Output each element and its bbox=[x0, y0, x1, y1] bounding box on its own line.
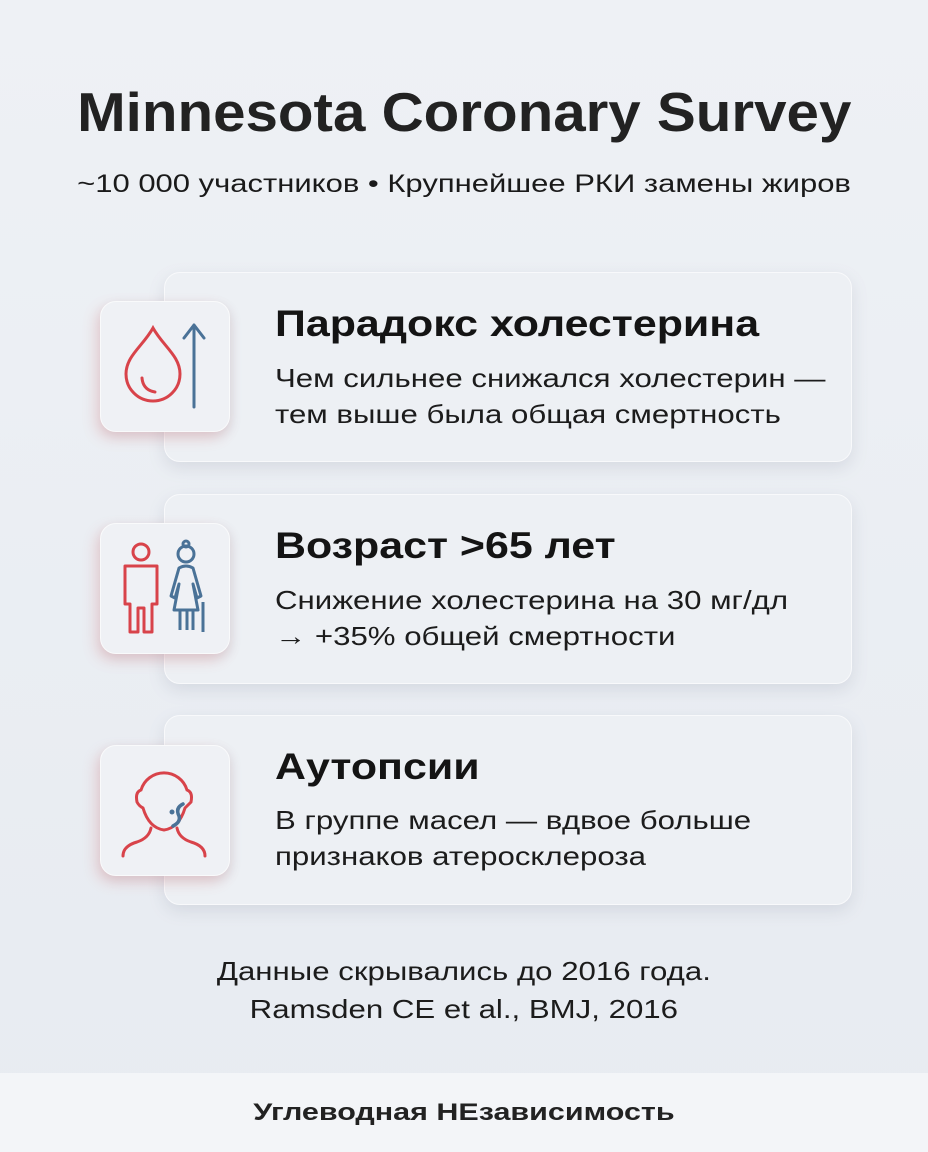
footer note: Ramsden CE et al., BMJ, 2016 bbox=[250, 994, 678, 1024]
text: paradox: Чем сильнее снижался холестерин — bbox=[275, 363, 825, 393]
text: autopsy: В группе масел — вдвое больше bbox=[275, 805, 751, 835]
title: Minnesota Coronary Survey bbox=[77, 81, 851, 143]
icon: head silhouette bbox=[100, 745, 230, 876]
heading: autopsy: Аутопсии bbox=[275, 746, 480, 787]
text: age: Снижение холестерина на 30 мг/дл bbox=[275, 585, 788, 615]
text: autopsy: признаков атеросклероза bbox=[275, 841, 646, 871]
bottom band bbox=[0, 1073, 928, 1152]
text: paradox bbox=[275, 363, 826, 429]
text: age bbox=[275, 585, 788, 651]
panel: cholesterol paradox bbox=[164, 272, 852, 462]
footer note: Данные скрывались до 2016 года. bbox=[217, 956, 711, 986]
bottom band: Углеводная НЕзависимость bbox=[253, 1099, 675, 1126]
panel: age bbox=[164, 494, 852, 684]
footer note bbox=[217, 956, 711, 1024]
text: autopsy bbox=[275, 805, 751, 871]
text: paradox: тем выше была общая смертность bbox=[275, 399, 781, 429]
panel: autopsy bbox=[164, 715, 852, 905]
subtitle: ~10 000 участников • Крупнейшее РКИ замены жиров bbox=[77, 170, 851, 198]
heading: paradox: Парадокс холестерина bbox=[275, 303, 759, 344]
text: age: → +35% общей смертности bbox=[275, 621, 675, 651]
heading: age: Возраст >65 лет bbox=[275, 525, 616, 566]
icon: elderly people bbox=[100, 523, 230, 654]
icon: blood drop with arrow bbox=[100, 301, 230, 432]
